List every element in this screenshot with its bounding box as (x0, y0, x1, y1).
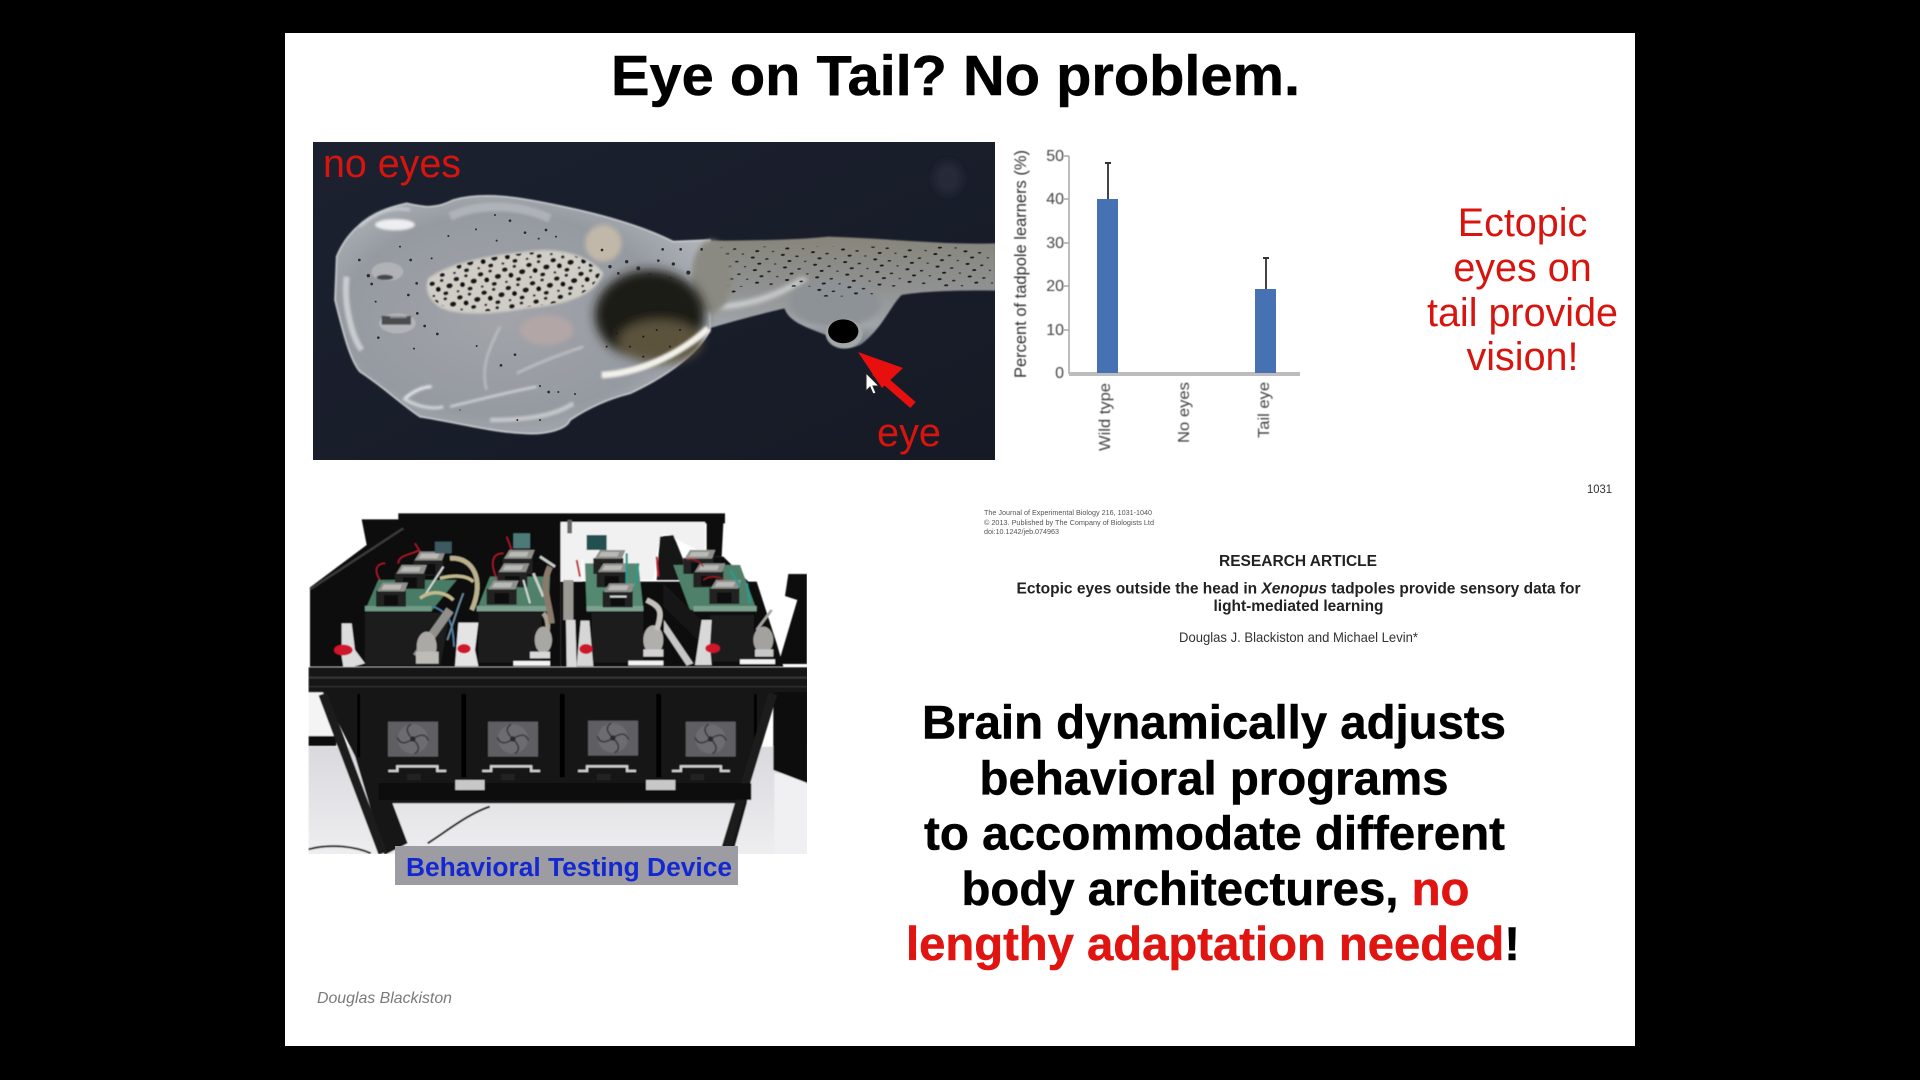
y axis (1064, 156, 1069, 374)
article title: light-mediated learning (1214, 598, 1384, 615)
device lower frame (309, 667, 809, 855)
journal citation (984, 508, 1154, 536)
x axis (1069, 372, 1300, 376)
x tick labels: No eyes (1176, 382, 1193, 443)
conclusion text: behavioral programs (980, 752, 1448, 804)
y tick labels: 30 (1046, 235, 1064, 252)
pale central patch (427, 250, 603, 314)
frame and dark back wall (310, 513, 783, 667)
small components and wires (376, 537, 750, 603)
scattered head spots (358, 214, 703, 421)
panel: tadpole photo (313, 142, 996, 460)
article type: RESEARCH ARTICLE (1219, 553, 1377, 570)
fans (388, 721, 736, 757)
device upper bay (310, 513, 807, 667)
y tick labels: 20 (1046, 278, 1064, 295)
ectopic eye (826, 319, 863, 349)
head outline (335, 196, 710, 434)
white slide panel (285, 33, 1635, 1046)
blend between body and tail (692, 240, 732, 313)
callout: ectopic eyes: Ectopic (1458, 201, 1587, 245)
gut speckles (606, 316, 691, 358)
callout: ectopic eyes (1427, 201, 1618, 379)
conclusion text: lengthy adaptation needed! (906, 917, 1520, 970)
bar: tail eye (1255, 258, 1276, 373)
x tick labels: Tail eye (1256, 382, 1273, 438)
photo credit: Douglas Blackiston (317, 990, 452, 1007)
dark gut (595, 270, 705, 363)
photo background (313, 142, 995, 460)
slide (285, 33, 1635, 1046)
y axis title: Percent of tadpole learners (%) (1011, 150, 1030, 378)
icon: mouse cursor (866, 373, 879, 394)
conclusion text (906, 696, 1520, 970)
ribbon cables (420, 558, 477, 647)
tail illustration (658, 237, 996, 349)
tadpole head and body (335, 196, 732, 434)
divider plates (563, 580, 710, 667)
pink tissue patch (520, 315, 573, 345)
authors: Douglas J. Blackiston and Michael Levin* (1179, 630, 1419, 645)
callout: ectopic eyes: eyes on (1453, 246, 1592, 290)
y tick labels: 50 (1046, 148, 1064, 165)
article title (1016, 580, 1580, 615)
silver clamps (416, 567, 773, 664)
callout: ectopic eyes: vision! (1467, 335, 1578, 379)
conclusion text: Brain dynamically adjusts (922, 696, 1506, 748)
pale crescent below gut (602, 328, 708, 375)
head highlights and membranes (346, 207, 583, 420)
floor (309, 692, 809, 855)
label: eye: eye (877, 411, 941, 455)
y tick labels: 10 (1046, 322, 1064, 339)
pale bulge around eye (792, 300, 878, 326)
journal citation: © 2013. Published by The Company of Biologists Ltd (984, 518, 1154, 527)
black housings (365, 613, 754, 665)
article title: Ectopic eyes outside the head in Xenopus tadpoles provide sensory data for (1016, 580, 1580, 598)
stacked sensor blocks (376, 533, 741, 607)
y tick labels: 40 (1046, 191, 1064, 208)
bar chart (1011, 148, 1300, 451)
x tick labels: Wild type (1097, 383, 1114, 451)
melanocyte spots (429, 252, 600, 311)
paper header (984, 482, 1612, 645)
x tick labels (1097, 382, 1273, 451)
arrow: red pointing at eye (858, 352, 913, 405)
front rail (309, 667, 808, 692)
callout: ectopic eyes: tail provide (1427, 291, 1618, 335)
red knobs (334, 644, 720, 655)
journal citation: The Journal of Experimental Biology 216, 1031-1040 (984, 508, 1152, 517)
journal citation: doi:10.1242/jeb.074963 (984, 527, 1059, 536)
sockets where eyes were (371, 262, 416, 333)
bar: wild type (1097, 163, 1118, 373)
tail spots (720, 246, 994, 297)
green circuit boards (365, 563, 757, 611)
conclusion text: body architectures, no (962, 862, 1470, 915)
power cable (428, 807, 490, 843)
y tick labels (1046, 148, 1064, 382)
right side panel (778, 574, 807, 664)
white toggles and bases (342, 620, 775, 667)
page number: 1031 (1587, 482, 1612, 496)
tail body (658, 237, 996, 348)
beige tissue patch (585, 225, 622, 262)
right side lower panel (773, 692, 808, 783)
faint glow in background (934, 162, 962, 194)
title: Eye on Tail? No problem. (611, 44, 1300, 108)
lower cabinet and legs (323, 692, 775, 855)
drawer handles (388, 766, 730, 790)
pale tail fin streak (713, 278, 805, 307)
head bright spot (375, 219, 415, 230)
panel: behavioral testing device photo (309, 513, 809, 855)
label: no eyes: no eyes (323, 142, 461, 186)
conclusion text: to accommodate different (924, 806, 1505, 860)
y tick labels: 0 (1055, 365, 1064, 382)
caption: behavioral testing device: Behavioral Testing Device (406, 852, 732, 882)
